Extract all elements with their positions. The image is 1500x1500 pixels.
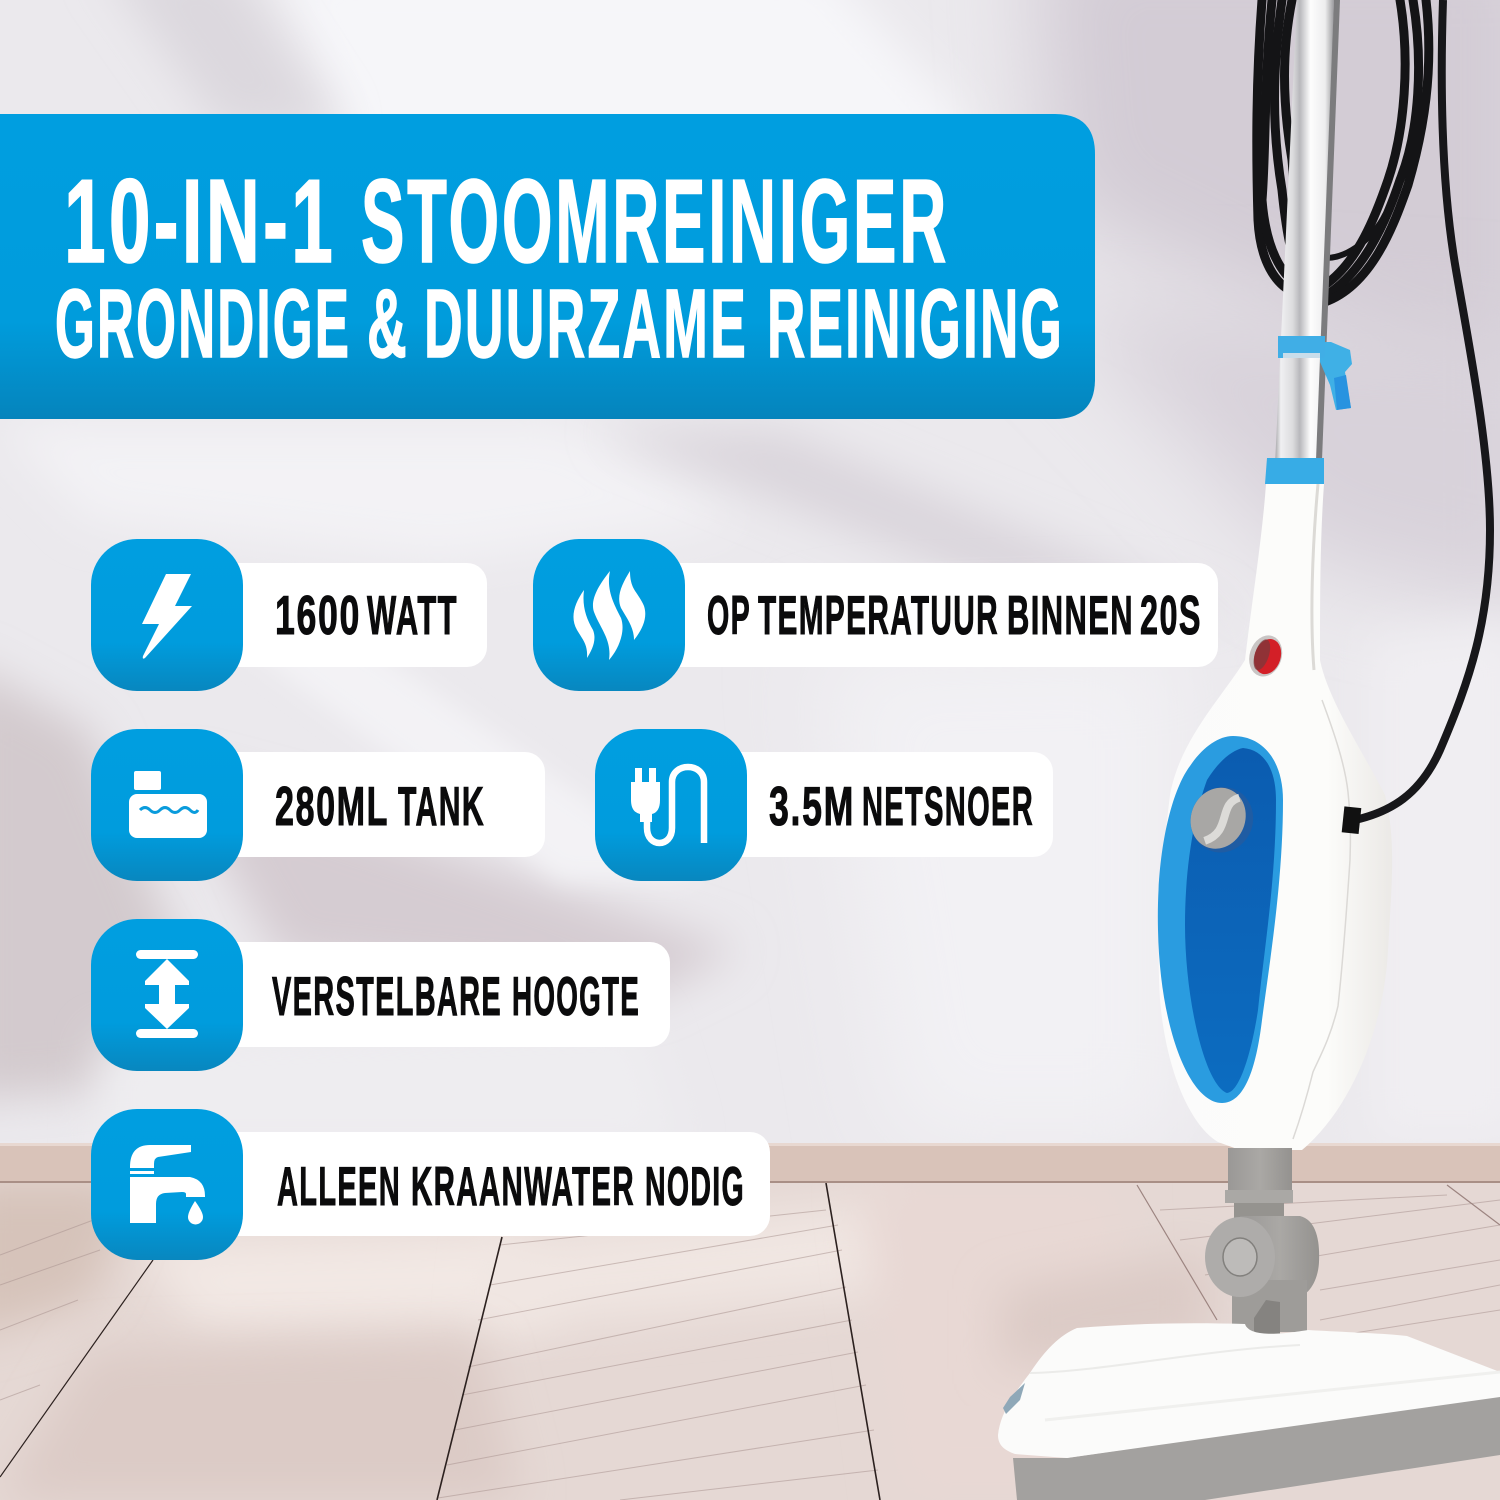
title line 1	[64, 155, 949, 288]
feature: adjustable height	[91, 919, 670, 1071]
header panel	[0, 114, 1095, 419]
title line 2: DUURZAME	[424, 269, 748, 378]
title line 1: 10-IN-1	[64, 155, 336, 288]
label: 1600 watt: 1600	[275, 584, 361, 646]
baseboard	[0, 1143, 1500, 1183]
feature: power cord	[595, 729, 1053, 881]
pole	[1275, 0, 1334, 465]
feature: tank	[91, 729, 545, 881]
icon: lightning bolt	[142, 574, 192, 659]
body	[1159, 484, 1392, 1150]
feature: temperature	[533, 539, 1218, 691]
tank cap	[1181, 778, 1263, 862]
label: tap water: NODIG	[645, 1155, 745, 1217]
label: tank: TANK	[398, 775, 485, 837]
steam mop product	[998, 0, 1500, 1500]
label: tank: 280ML	[275, 775, 389, 837]
icon: water tank	[129, 771, 207, 838]
icon: height arrows	[136, 950, 198, 1038]
title line 2: &	[367, 269, 409, 378]
icon: tap	[130, 1145, 205, 1225]
upper blue clip	[1278, 336, 1352, 410]
label: adjustable height: HOOGTE	[512, 965, 640, 1027]
floor seams	[0, 1183, 1500, 1500]
label: 1600 watt: WATT	[367, 584, 458, 646]
power cord coil	[1257, 0, 1429, 302]
long cord	[1355, 0, 1490, 820]
label: power cord	[769, 775, 1034, 837]
title line 2: GRONDIGE	[55, 269, 351, 378]
floor	[0, 1180, 1500, 1500]
label: temperature: 20S	[1140, 584, 1202, 646]
label: adjustable height: VERSTELBARE	[272, 965, 502, 1027]
label: tap water: KRAANWATER	[411, 1155, 635, 1217]
neck	[1225, 1148, 1293, 1225]
power switch	[1244, 631, 1287, 681]
icon: steam waves	[573, 571, 645, 660]
title line 1: STOOMREINIGER	[361, 155, 949, 288]
pole serrated rail	[1316, 0, 1340, 460]
title line 2: REINIGING	[767, 269, 1064, 378]
label: temperature: TEMPERATUUR	[758, 584, 999, 646]
feature: 1600 watt	[91, 539, 487, 691]
label: temperature: OP	[707, 584, 751, 646]
label: power cord: 3.5M	[769, 775, 855, 837]
label: tap water: ALLEEN	[277, 1155, 401, 1217]
label: tap water	[277, 1155, 745, 1217]
label: power cord: NETSNOER	[862, 775, 1034, 837]
background: wall	[0, 0, 1500, 1150]
cord clamp	[1342, 806, 1361, 834]
lower blue ring	[1265, 458, 1324, 484]
swivel joint	[1205, 1216, 1319, 1334]
title line 2	[55, 269, 1064, 378]
cleaning head	[998, 1323, 1500, 1500]
water tank window	[1158, 736, 1283, 1103]
icon: plug and cord	[631, 767, 704, 843]
floor plank lines	[0, 1195, 1500, 1500]
label: temperature: BINNEN	[1007, 584, 1134, 646]
feature: tap water	[91, 1109, 770, 1260]
